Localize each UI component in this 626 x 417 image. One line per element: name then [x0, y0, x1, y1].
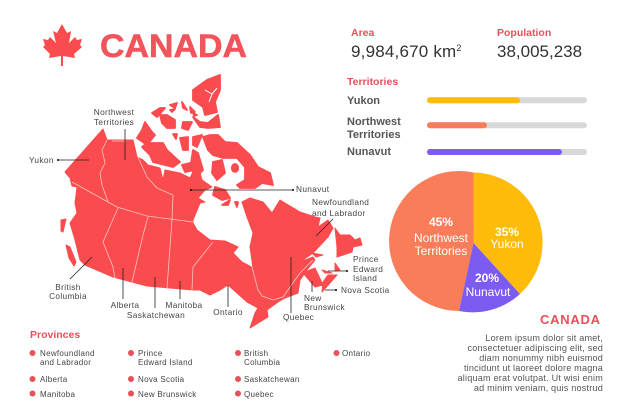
label: Nunavut: [190, 184, 330, 194]
icon: maple leaf: [43, 24, 82, 66]
label: Prince Edward Island: Island: [353, 273, 377, 283]
bar: Northwest Territories: Territories: [347, 129, 401, 141]
label: British Columbia: British: [55, 282, 81, 292]
label: Ontario: Ontario: [213, 307, 243, 317]
text block: lorem ipsum: diam nonummy nibh euismod: [479, 353, 603, 363]
heading: lower CANADA: CANADA: [540, 312, 601, 327]
label: Saskatchewan: [127, 277, 185, 320]
label: Manitoba: [166, 281, 202, 310]
pie label: Yukon: Yukon: [490, 237, 524, 251]
slice: Northwest Territories 45%: [389, 171, 474, 311]
label: Northwest Territories: Territories: [94, 117, 134, 127]
legend names: Quebec: [244, 390, 274, 399]
label: British Columbia: [49, 257, 92, 301]
stat: area: 2: [456, 43, 462, 53]
label: Newfoundland and Labrador: Newfoundland: [312, 197, 369, 207]
arctic islands: [137, 75, 273, 207]
pie label: Yukon: 35%: [495, 225, 519, 239]
legend names: British: [244, 349, 268, 358]
label: New Brunswick: New: [304, 293, 322, 303]
label: Yukon: Yukon: [29, 155, 54, 165]
label: Nunavut: Nunavut: [296, 184, 330, 194]
label: Prince Edward Island: Edward: [353, 264, 383, 274]
text block: lorem ipsum: ad minim veniam, quis nostrud: [474, 383, 603, 393]
text block: lorem ipsum: aliquam erat volutpat. Ut wisi enim: [458, 373, 603, 383]
label: Yukon: [29, 155, 89, 165]
pie label: Northwest Territories: Northwest: [414, 231, 469, 245]
Maritimes: [303, 268, 323, 287]
bar: Nunavut: Nunavut: [347, 146, 391, 158]
province borders: [72, 140, 313, 300]
legend names: New Brunswick: [138, 390, 197, 399]
pie label: Yukon: [490, 225, 524, 251]
legend names: and Labrador: [40, 358, 91, 367]
legend names: Manitoba: [40, 390, 76, 399]
legend names: Edward Island: [138, 358, 193, 367]
label: British Columbia: Columbia: [49, 291, 87, 301]
label: Quebec: Quebec: [283, 312, 314, 322]
label: Alberta: [111, 268, 139, 310]
pie label: Nunavut: Nunavut: [466, 285, 511, 299]
pie label: Northwest Territories: 45%: [429, 215, 453, 229]
label: Newfoundland and Labrador: [312, 197, 369, 236]
bar: Northwest Territories: Northwest: [347, 116, 401, 128]
title: CANADA: [100, 28, 247, 64]
legend names: Newfoundland: [40, 349, 95, 358]
legend names: Columbia: [244, 358, 280, 367]
stat: area: [351, 27, 462, 61]
map labels: [29, 107, 390, 322]
text block: lorem ipsum: [458, 333, 604, 393]
stat: population: [497, 27, 582, 61]
stat: population: Population: [497, 27, 551, 39]
label: New Brunswick: [304, 281, 345, 312]
bar: Yukon: Yukon: [347, 95, 380, 107]
Newfoundland: [335, 228, 362, 257]
label: Manitoba: Manitoba: [166, 300, 202, 310]
Arctic channels: [205, 88, 217, 102]
mainland: [65, 129, 333, 328]
stat: area: Area: [351, 27, 375, 39]
pie label: Nunavut: [466, 271, 511, 299]
label: Northwest Territories: Northwest: [94, 107, 135, 117]
label: Prince Edward Island: [328, 254, 383, 283]
label: Newfoundland and Labrador: and Labrador: [312, 208, 366, 218]
bar: Nunavut: [347, 146, 587, 158]
label: Quebec: [283, 257, 314, 322]
legend names: Alberta: [40, 375, 68, 384]
stat: area: 9,984,670 km: [351, 42, 456, 61]
slice: Nunavut 20%: [459, 243, 520, 312]
pie label: Nunavut: 20%: [475, 271, 499, 285]
stat: population: 38,005,238: [497, 42, 582, 61]
west coast island: [66, 245, 76, 266]
map of Canada: [61, 75, 362, 328]
pie label: Northwest Territories: [414, 215, 469, 258]
text block: lorem ipsum: tincidunt ut laoreet dolore magna: [464, 363, 604, 373]
panel: territories bars: [347, 76, 587, 158]
bar: Yukon: [347, 95, 587, 107]
slice: Yukon 35%: [474, 172, 543, 294]
legend names: [40, 349, 371, 399]
label: Ontario: [213, 285, 243, 317]
bar: Northwest Territories: [347, 116, 587, 141]
label: Nova Scotia: Nova Scotia: [341, 285, 390, 295]
panel: provinces legend: [30, 329, 371, 399]
label: New Brunswick: Brunswick: [304, 302, 345, 312]
label: Prince Edward Island: Prince: [353, 254, 379, 264]
pie chart: [389, 171, 543, 312]
heading: provinces: Provinces: [30, 329, 80, 341]
label: Alberta: Alberta: [111, 300, 139, 310]
label: Saskatchewan: Saskatchewan: [127, 310, 185, 320]
text block: lorem ipsum: Lorem ipsum dolor sit amet,: [485, 333, 603, 343]
label: Northwest Territories: [94, 107, 135, 160]
pie label: Northwest Territories: Territories: [415, 244, 467, 258]
legend names: Prince: [138, 349, 163, 358]
text block: lorem ipsum: consectetuer adipiscing elit, sed: [467, 343, 603, 353]
heading: territories: Territories: [347, 76, 398, 88]
legend names: Nova Scotia: [138, 375, 185, 384]
legend names: Saskatchewan: [244, 375, 300, 384]
legend dots: [30, 350, 340, 396]
legend names: Ontario: [342, 349, 371, 358]
